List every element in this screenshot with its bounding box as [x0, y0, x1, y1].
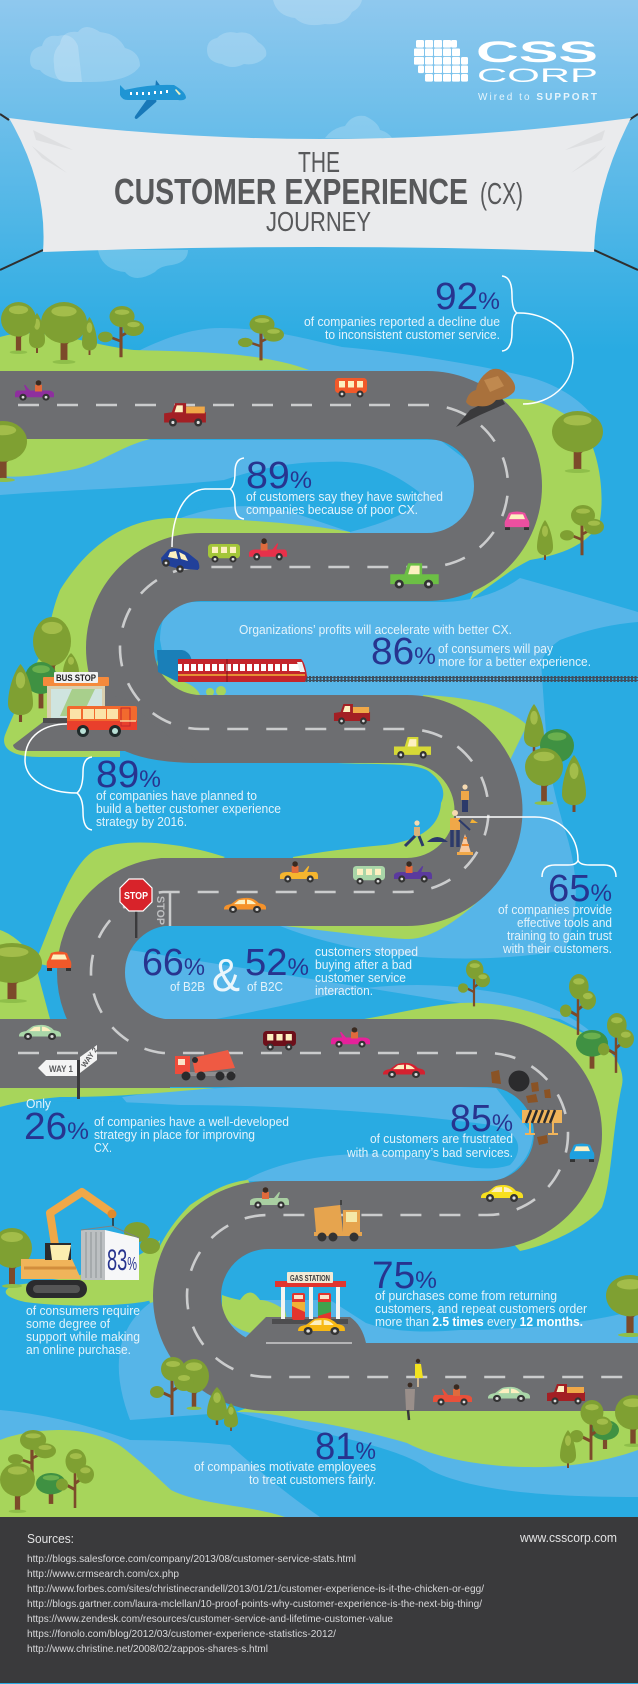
mint van — [353, 866, 385, 885]
sources list: http://www.christine.net/2008/02/zappos-shares-s.html — [27, 1643, 268, 1655]
railway track — [302, 678, 638, 680]
sources list: http://www.forbes.com/sites/christinecrandell/2013/01/21/customer-experience-is-it-the-chicken-or-egg/ — [27, 1583, 484, 1595]
stat 65%: with their customers. — [502, 942, 612, 956]
stat 65% — [498, 868, 612, 956]
stat 89% planned: 89% — [96, 754, 161, 796]
stop sign: STOP — [124, 890, 148, 902]
bus stop shelter: BUS STOP — [56, 673, 97, 684]
website: www.csscorp.com — [519, 1530, 617, 1545]
footer panel — [0, 1517, 638, 1683]
airplane — [120, 80, 186, 118]
stat 83% text: some degree of — [26, 1317, 111, 1331]
stat 92%: to inconsistent customer service. — [325, 328, 500, 342]
gas station — [272, 1272, 348, 1324]
road barricade — [522, 1110, 562, 1134]
pink convertible — [331, 1027, 370, 1048]
excavator and container: 83% — [107, 1244, 137, 1277]
way signs: WAY 1 — [49, 1064, 74, 1075]
company logo: Wired to SUPPORT — [478, 92, 597, 103]
stat 65%: 65% — [548, 868, 612, 910]
trees right of third curve — [524, 704, 586, 812]
train — [178, 659, 307, 682]
red convertible — [433, 1384, 472, 1406]
trees behind container — [124, 1222, 160, 1254]
trees right of fifth curve — [458, 960, 634, 1073]
cone and branch trees right — [537, 505, 604, 560]
stat 89% planned: build a better customer experience — [96, 802, 281, 816]
stat 65%: effective tools and — [517, 916, 612, 930]
way signs — [38, 1045, 100, 1099]
stop line and road marking: STOP — [154, 896, 166, 925]
sources list: https://www.zendesk.com/resources/customer-service-and-lifetime-customer-value — [27, 1613, 393, 1625]
trees lower right — [560, 1395, 638, 1468]
stat 92%: 92% — [435, 276, 500, 318]
stat 26%: of companies have a well-developed — [94, 1115, 289, 1129]
stat 66% and 52% — [142, 942, 418, 1001]
tree near road start — [238, 315, 284, 360]
stat 83% text: of consumers require — [26, 1304, 140, 1318]
stat 85% — [346, 1098, 513, 1160]
sources list: https://fonolo.com/blog/2012/03/customer-experience-statistics-2012/ — [27, 1628, 336, 1640]
tree group top left — [1, 302, 144, 364]
stat 66% and 52%: interaction. — [315, 984, 373, 998]
stat 75%: more than 2.5 times every 12 months. — [375, 1315, 583, 1329]
light sliver above land — [175, 506, 350, 532]
title text: JOURNEY — [266, 206, 371, 237]
purple convertible — [15, 380, 54, 401]
company logo: CSS — [476, 36, 598, 69]
cement truck — [175, 1050, 236, 1080]
yellow convertible — [280, 861, 318, 883]
vehicles — [15, 378, 594, 1406]
stat 83% text: support while making — [26, 1330, 140, 1344]
tree behind excavator — [0, 1228, 32, 1288]
stat 86%: more for a better experience. — [438, 655, 591, 669]
stat 89% switched — [246, 455, 443, 517]
tree left edge — [0, 421, 27, 482]
road — [0, 405, 638, 1377]
stat 85%: 85% — [450, 1098, 513, 1140]
pedestrians — [405, 1359, 423, 1420]
stop line and road marking — [154, 892, 170, 926]
clouds — [30, 0, 392, 278]
stat 26%: 26% — [24, 1106, 89, 1148]
trees bottom left — [0, 1430, 94, 1513]
company logo — [414, 36, 598, 103]
mint hatchback — [488, 1387, 530, 1402]
stat 66% and 52%: of B2B — [170, 980, 205, 994]
blue front car — [570, 1143, 594, 1162]
sources heading: Sources: — [27, 1531, 74, 1546]
brace connector 92% — [502, 276, 573, 404]
green pickup — [390, 563, 439, 589]
stat 81% — [194, 1426, 376, 1487]
red front car — [47, 952, 71, 971]
stat 75% — [372, 1255, 587, 1329]
excavator and container — [21, 1192, 139, 1298]
stat 89% switched: 89% — [246, 455, 312, 497]
road workers — [405, 784, 478, 855]
stat 65%: of companies provide — [498, 903, 612, 917]
company logo: CORP — [477, 66, 598, 87]
stat 86%: 86% — [371, 631, 436, 673]
forecourt line — [266, 1342, 352, 1344]
stat 26%: Only — [26, 1097, 52, 1111]
stat 85%: with a company’s bad services. — [346, 1146, 513, 1160]
stat 66% and 52%: customer service — [315, 971, 406, 985]
brace connector 89% switched — [172, 458, 244, 547]
stat 75%: customers, and repeat customers order — [375, 1302, 587, 1316]
light water bands — [0, 328, 638, 1517]
dark red pickup — [334, 704, 370, 725]
gas station: GAS STATION — [290, 1273, 330, 1283]
red pickup — [164, 403, 206, 427]
stat 86% — [239, 623, 591, 673]
yellow forecourt car — [298, 1318, 345, 1335]
stat 89% planned: strategy by 2016. — [96, 815, 187, 829]
sources list: http://blogs.gartner.com/laura-mclellan/10-proof-points-why-customer-experience-is-the-next-big-thing/ — [27, 1598, 482, 1610]
stat 26%: CX. — [94, 1141, 112, 1155]
stat 66% and 52%: 66% — [142, 942, 205, 984]
bus stop trees — [8, 617, 79, 722]
stop sign — [120, 879, 152, 938]
pink car — [505, 511, 529, 530]
stat 66% and 52%: & — [212, 949, 240, 1001]
tree left middle — [0, 943, 42, 1003]
stat 65%: training to gain trust — [507, 929, 612, 943]
orange van — [335, 378, 367, 398]
title text — [114, 147, 523, 237]
dump truck — [314, 1200, 362, 1242]
lime van — [208, 544, 240, 563]
tree right edge — [606, 1275, 638, 1337]
title text: (CX) — [480, 176, 523, 211]
road hazards: boulder and rocks — [491, 1070, 551, 1145]
yellow pickup — [394, 737, 431, 759]
sources list — [27, 1553, 484, 1655]
trees lower centre — [150, 1357, 238, 1431]
red pickup — [547, 1384, 585, 1405]
stat 89% planned — [96, 754, 281, 829]
brace connector 89% planned — [25, 724, 92, 830]
stat 75%: of purchases come from returning — [375, 1289, 557, 1303]
blue car — [161, 548, 199, 573]
bus — [67, 706, 137, 737]
road centre dashes — [18, 405, 638, 1377]
tree right of first curve — [552, 411, 603, 473]
stat 81%: of companies motivate employees — [194, 1460, 376, 1474]
stat 66% and 52%: 52% — [245, 942, 309, 984]
stat 66% and 52%: buying after a bad — [315, 958, 412, 972]
mint hatchback — [19, 1025, 61, 1040]
title banner — [9, 118, 631, 252]
sky gradient — [0, 0, 638, 350]
sources list: http://blogs.salesforce.com/company/2013/08/customer-service-stats.html — [27, 1553, 356, 1565]
stat 81%: 81% — [315, 1426, 376, 1468]
stat 85%: of customers are frustrated — [370, 1132, 513, 1146]
title text: THE — [298, 147, 340, 179]
stat 66% and 52%: of B2C — [247, 980, 283, 994]
stat 89% planned: of companies have planned to — [96, 789, 257, 803]
purple convertible — [394, 861, 432, 883]
yellow sedan — [481, 1185, 523, 1202]
stat 83% text — [26, 1304, 140, 1357]
stat 83% text: an online purchase. — [26, 1343, 131, 1357]
green land areas — [0, 333, 638, 1517]
orange sedan — [224, 898, 266, 913]
title text: CUSTOMER EXPERIENCE — [114, 171, 468, 212]
tunnel — [157, 650, 192, 682]
stat 26%: strategy in place for improving — [94, 1128, 255, 1142]
stat 89% switched: companies because of poor CX. — [246, 503, 418, 517]
stat 81%: to treat customers fairly. — [249, 1473, 376, 1487]
stat 66% and 52%: customers stopped — [315, 945, 418, 959]
bus stop shelter — [43, 672, 109, 723]
trees — [0, 302, 638, 1513]
stat 92% — [304, 276, 500, 342]
banner ropes — [0, 114, 638, 270]
stat 86%: of consumers will pay — [438, 642, 554, 656]
way signs: WAY 2 — [79, 1046, 100, 1069]
rockfall on the road — [456, 369, 515, 427]
red convertible — [249, 538, 287, 561]
stat 89% switched: of customers say they have switched — [246, 490, 443, 504]
stat 26% — [24, 1097, 289, 1155]
stat 75%: 75% — [372, 1255, 437, 1297]
stat 92%: of companies reported a decline due — [304, 315, 500, 329]
mint convertible — [250, 1187, 289, 1209]
dark red van — [263, 1031, 296, 1050]
brace connector 65% — [456, 817, 616, 877]
darker water patches — [0, 462, 518, 1280]
sources list: http://www.crmsearch.com/cx.php — [27, 1568, 179, 1580]
red sedan — [383, 1063, 425, 1078]
stat 86%: Organizations’ profits will accelerate with better CX. — [239, 623, 512, 637]
